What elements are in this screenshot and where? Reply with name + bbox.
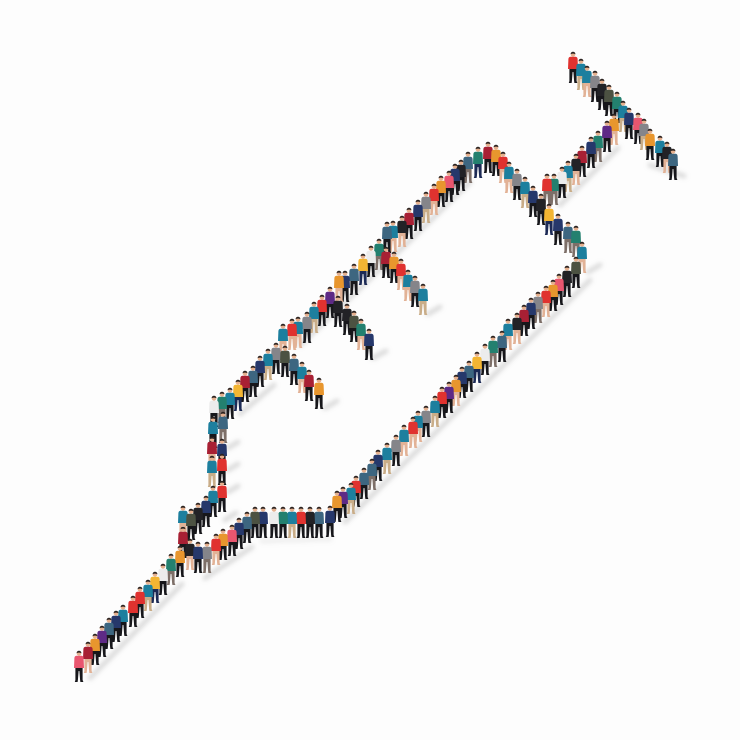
plunger rod: [542, 114, 619, 205]
floor shadows: [90, 148, 684, 678]
needle hub: [178, 496, 228, 573]
needle: [74, 546, 185, 682]
plunger handle: [568, 52, 678, 180]
measurement tick 3: [381, 247, 428, 315]
measurement tick 2: [333, 296, 374, 360]
barrel tip left side: [207, 412, 228, 517]
barrel top edge: [209, 142, 587, 427]
measurement tick 1: [289, 354, 324, 409]
syringe made of people: [74, 52, 678, 682]
barrel bottom edge: [332, 257, 581, 522]
barrel tip bottom row: [227, 506, 335, 556]
